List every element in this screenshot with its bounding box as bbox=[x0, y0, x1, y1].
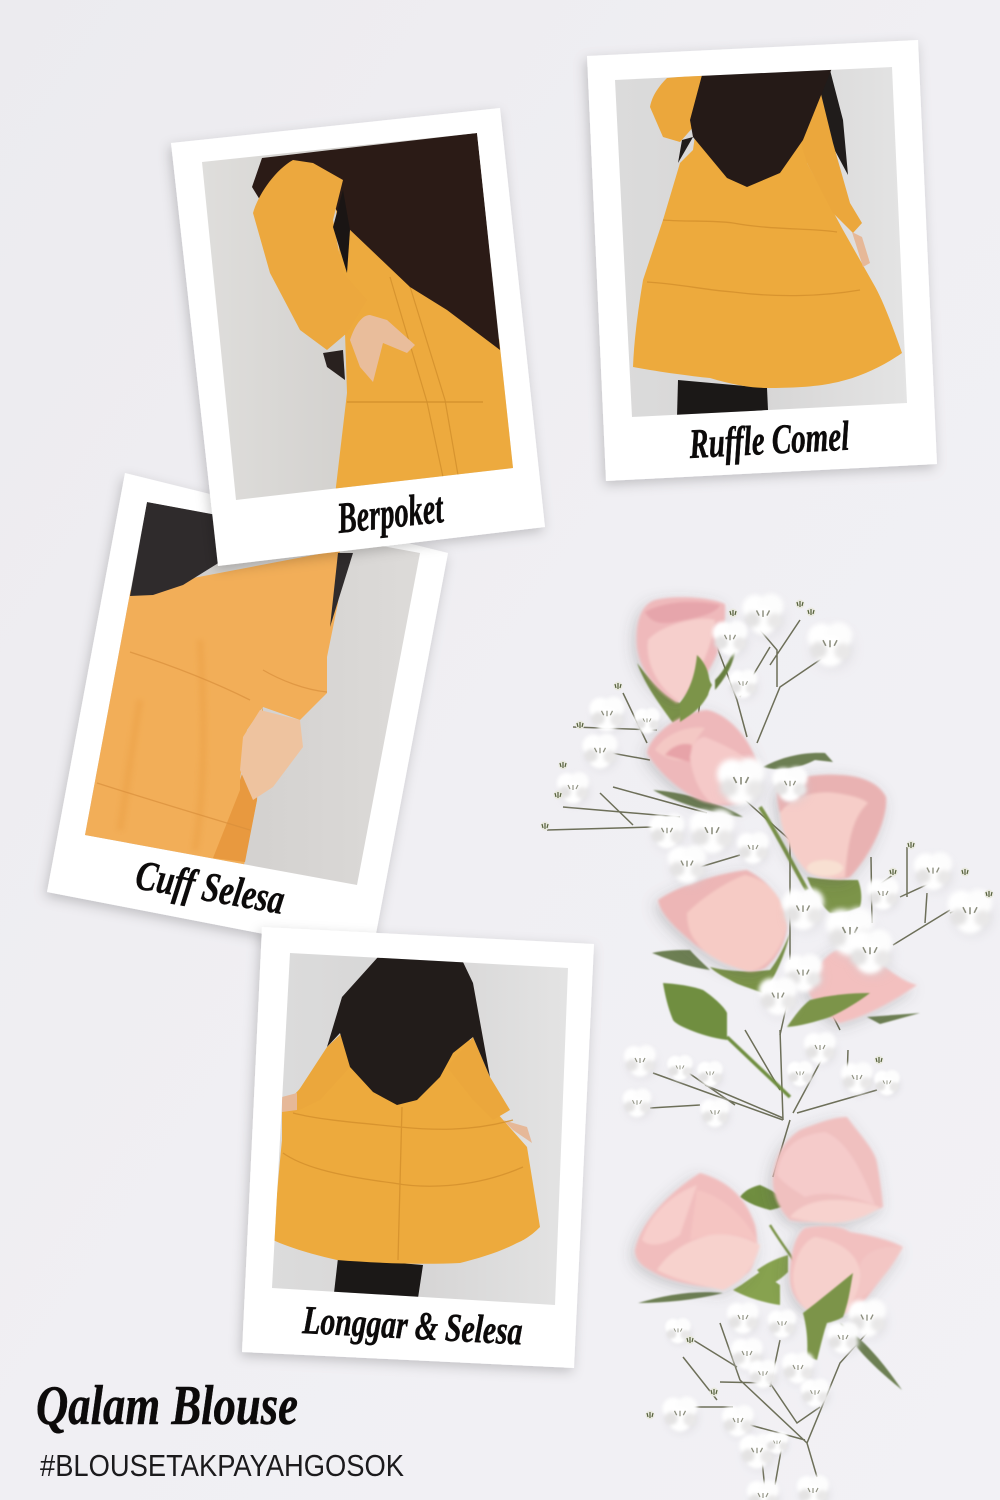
photo: full garment bbox=[265, 945, 575, 1310]
hashtag: #BLOUSETAKPAYAHGOSOK bbox=[40, 1448, 404, 1483]
rose 8 bbox=[790, 1226, 903, 1314]
photo: ruffle detail bbox=[615, 67, 907, 417]
rose 5 bbox=[807, 950, 917, 1023]
flower arrangement bbox=[540, 594, 994, 1500]
caption: Longgar & Selesa: Longgar & Selesa bbox=[301, 1297, 524, 1354]
leaves and sepals bbox=[637, 645, 920, 1390]
rose 4 bbox=[658, 870, 787, 971]
rose 2 bbox=[647, 710, 757, 805]
baby's breath sprigs bbox=[540, 594, 994, 1500]
caption: Ruffle Comel: Ruffle Comel bbox=[687, 414, 851, 468]
photo: pocket detail bbox=[202, 133, 513, 500]
rose 6 bbox=[773, 1117, 883, 1223]
stems bbox=[547, 620, 990, 1490]
caption: Cuff Selesa: Cuff Selesa bbox=[132, 853, 288, 924]
title: Qalam Blouse: Qalam Blouse bbox=[36, 1375, 298, 1437]
polaroid: Cuff Selesa bbox=[47, 473, 460, 955]
photo: cuff detail bbox=[85, 502, 420, 885]
rose 1 bud bbox=[637, 597, 725, 703]
caption: Berpoket: Berpoket bbox=[334, 483, 447, 543]
sepals over roses bbox=[680, 655, 870, 1360]
rose 7 bbox=[635, 1173, 760, 1290]
rose 3 bbox=[777, 775, 886, 879]
polaroid: Berpoket bbox=[171, 108, 545, 566]
polaroid: Longgar & Selesa bbox=[242, 927, 594, 1368]
polaroid: Ruffle Comel bbox=[587, 40, 937, 481]
roses bbox=[635, 597, 917, 1314]
